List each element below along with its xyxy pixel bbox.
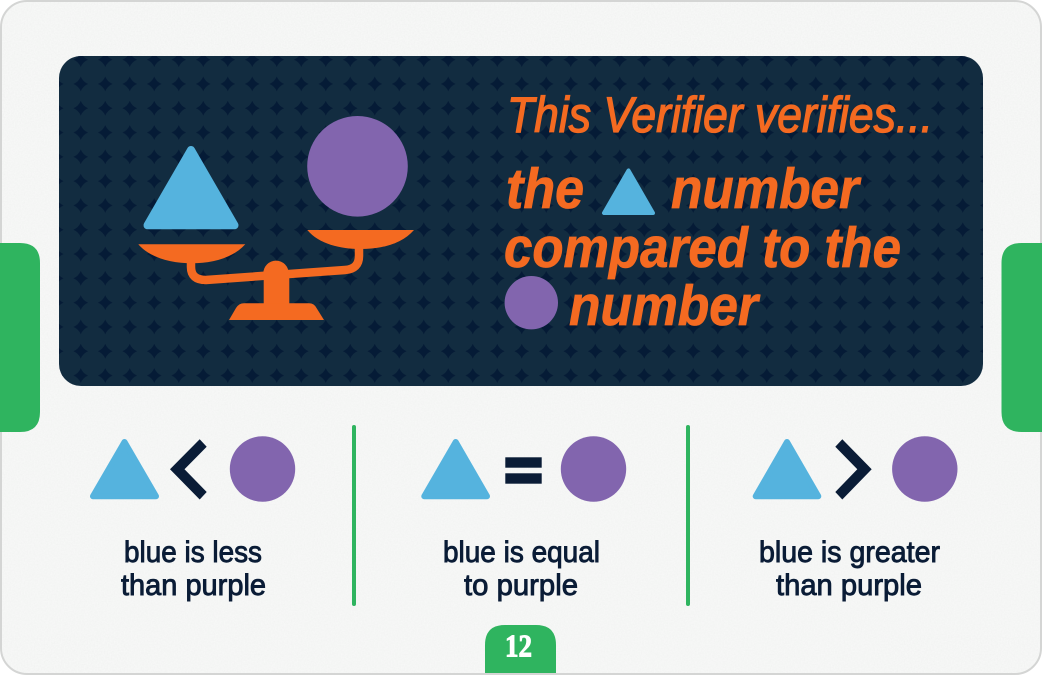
text: the triangle number compared to the circle number: compared to the xyxy=(504,216,901,280)
page number tab: 12 xyxy=(505,628,532,664)
text: blue is greater than purple xyxy=(759,536,940,602)
text: blue is equal to purple: to purple xyxy=(464,569,578,602)
left green tab xyxy=(0,243,40,432)
text: blue is greater than purple: blue is greater xyxy=(759,536,940,569)
right green tab xyxy=(1002,243,1042,432)
text: the triangle number compared to the circle number xyxy=(504,157,901,338)
panel: blue equal to purple xyxy=(424,436,626,602)
text: the triangle number compared to the circle number: the xyxy=(506,157,584,221)
text: blue is less than purple: blue is less xyxy=(124,536,262,569)
text: blue is equal to purple xyxy=(443,536,600,602)
panel: verifier description xyxy=(59,56,983,386)
icon: balance scale with triangle and circle xyxy=(138,116,414,320)
text: the triangle number compared to the circle number: number xyxy=(569,274,761,338)
page number tab xyxy=(485,625,556,673)
text: blue is equal to purple: blue is equal xyxy=(443,536,600,569)
text: blue is less than purple xyxy=(121,536,266,602)
text: blue is greater than purple: than purple xyxy=(776,569,922,602)
heading: This Verifier verifies...: This Verifier verifies... xyxy=(507,87,933,143)
text: the triangle number compared to the circle number: number xyxy=(671,157,862,221)
icon: greater than comparison xyxy=(756,436,958,502)
icon: equal comparison xyxy=(424,436,626,502)
icon: inline triangle xyxy=(604,170,653,213)
icon: less than comparison xyxy=(93,436,295,502)
text: blue is less than purple: than purple xyxy=(121,569,266,602)
panel: blue greater than purple xyxy=(756,436,958,602)
icon: inline circle xyxy=(505,276,558,329)
panel: blue less than purple xyxy=(93,436,295,602)
